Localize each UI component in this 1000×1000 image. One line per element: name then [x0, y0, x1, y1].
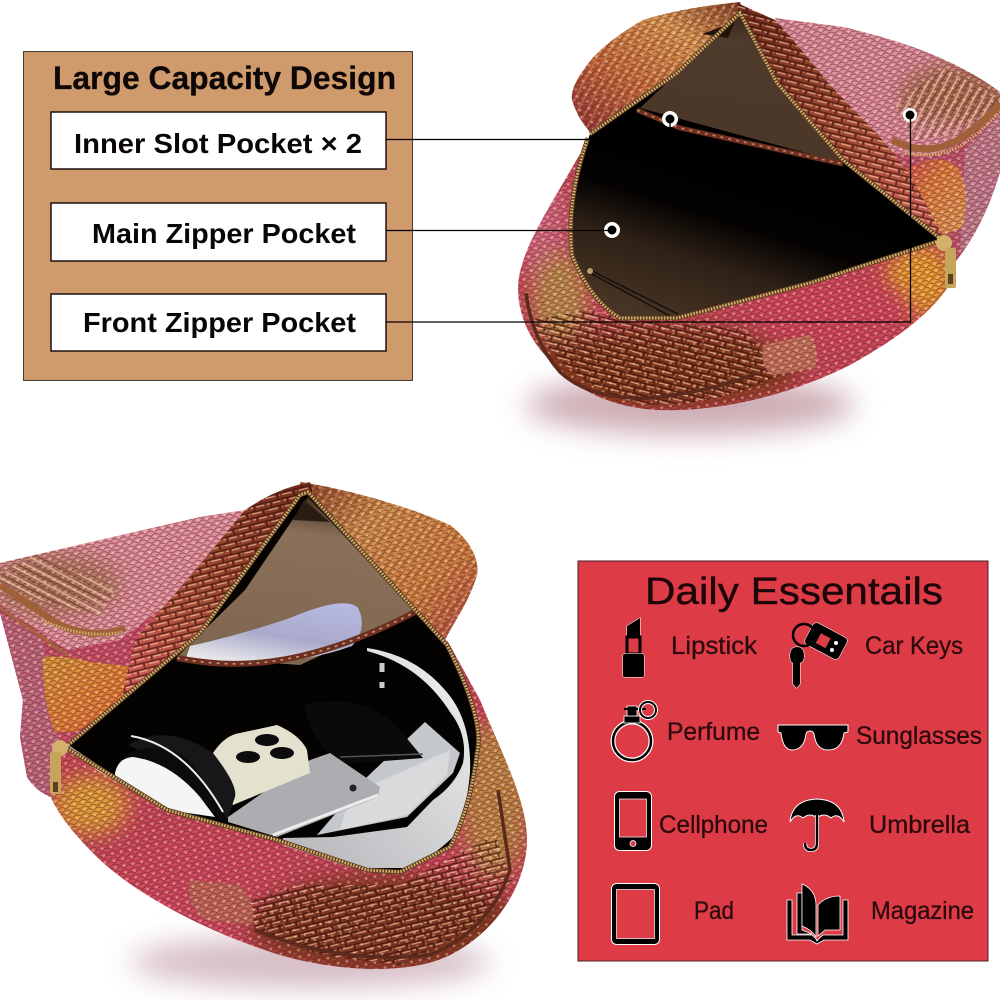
handle strap	[526, 293, 757, 398]
bag front body	[518, 152, 948, 410]
leader line: inner slot pocket	[386, 119, 670, 140]
label: main zipper pocket: Main Zipper Pocket	[92, 218, 356, 249]
item: umbrella: Umbrella	[869, 811, 970, 839]
inner front zipper pocket	[587, 268, 678, 316]
pouch in slot pocket	[186, 603, 362, 663]
zipper pull	[50, 740, 68, 794]
item: pad	[612, 884, 734, 944]
leader line: main zipper pocket	[386, 230, 612, 232]
item: sunglasses	[778, 722, 982, 750]
bag shadow	[525, 375, 855, 435]
item: magazine: Magazine	[871, 897, 974, 925]
item: car keys: Car Keys	[865, 632, 963, 660]
inner slot pocket seam	[637, 110, 843, 164]
handle strap	[255, 790, 510, 957]
bag back panel	[0, 510, 245, 797]
laptop sleeve	[283, 648, 470, 868]
item: umbrella	[790, 799, 970, 850]
item: perfume	[613, 702, 760, 760]
item: lipstick	[623, 618, 758, 677]
label: front zipper pocket: Front Zipper Pocket	[83, 307, 356, 338]
item: magazine	[787, 884, 974, 944]
inner slot pocket seam	[177, 612, 415, 664]
icon: umbrella	[790, 799, 844, 850]
top-right bag photo	[510, 2, 1000, 435]
zipper pull	[936, 235, 956, 288]
heading: daily essentials: Daily Essentails	[645, 571, 943, 613]
pointer: inner slot dot	[662, 111, 678, 127]
phone camera module	[213, 725, 310, 805]
icon: car keys	[790, 621, 848, 688]
icon: lipstick	[623, 618, 644, 677]
phone	[228, 753, 380, 837]
icon: sunglasses	[778, 725, 848, 750]
label: inner slot pocket: Inner Slot Pocket × 2	[74, 128, 362, 159]
heading: large capacity design: Large Capacity Design	[53, 60, 396, 96]
bottom-left bag photo with items	[0, 482, 540, 988]
label: main zipper pocket	[51, 203, 386, 261]
item: lipstick: Lipstick	[671, 632, 758, 660]
item: car keys	[790, 621, 963, 688]
label: inner slot pocket	[51, 112, 386, 169]
item: cellphone: Cellphone	[659, 811, 768, 839]
item: cellphone	[614, 792, 768, 850]
bag interior	[571, 13, 942, 318]
bag shadow	[130, 936, 490, 988]
item: pad: Pad	[694, 897, 734, 925]
tablet	[317, 722, 460, 835]
leader line: front zipper pocket	[386, 115, 910, 322]
handle patch	[189, 880, 254, 925]
panel: large capacity design	[24, 52, 412, 380]
bag front body	[40, 630, 540, 980]
bag right flap strip	[737, 3, 945, 240]
lower zipper	[62, 492, 478, 872]
bag left flap strip	[120, 482, 320, 705]
handle patch	[762, 335, 817, 375]
bag back panel	[775, 18, 1000, 261]
sunglasses	[305, 663, 423, 764]
panel: daily essentials	[578, 561, 988, 961]
item: sunglasses: Sunglasses	[856, 722, 982, 750]
bag interior	[68, 492, 478, 872]
icon: magazine	[787, 884, 848, 944]
bag right flap	[300, 482, 478, 660]
icon: pad	[612, 884, 660, 944]
main zipper	[571, 13, 942, 318]
item: perfume: Perfume	[667, 718, 760, 746]
icon: perfume	[613, 702, 656, 760]
label: front zipper pocket	[51, 294, 386, 351]
icon: cellphone	[614, 792, 652, 850]
pointer: main pocket dot	[604, 222, 620, 238]
pointer: front pocket dot	[903, 108, 917, 122]
bag left flap	[572, 2, 745, 134]
mask under phone	[340, 750, 450, 830]
headphones	[115, 735, 235, 822]
